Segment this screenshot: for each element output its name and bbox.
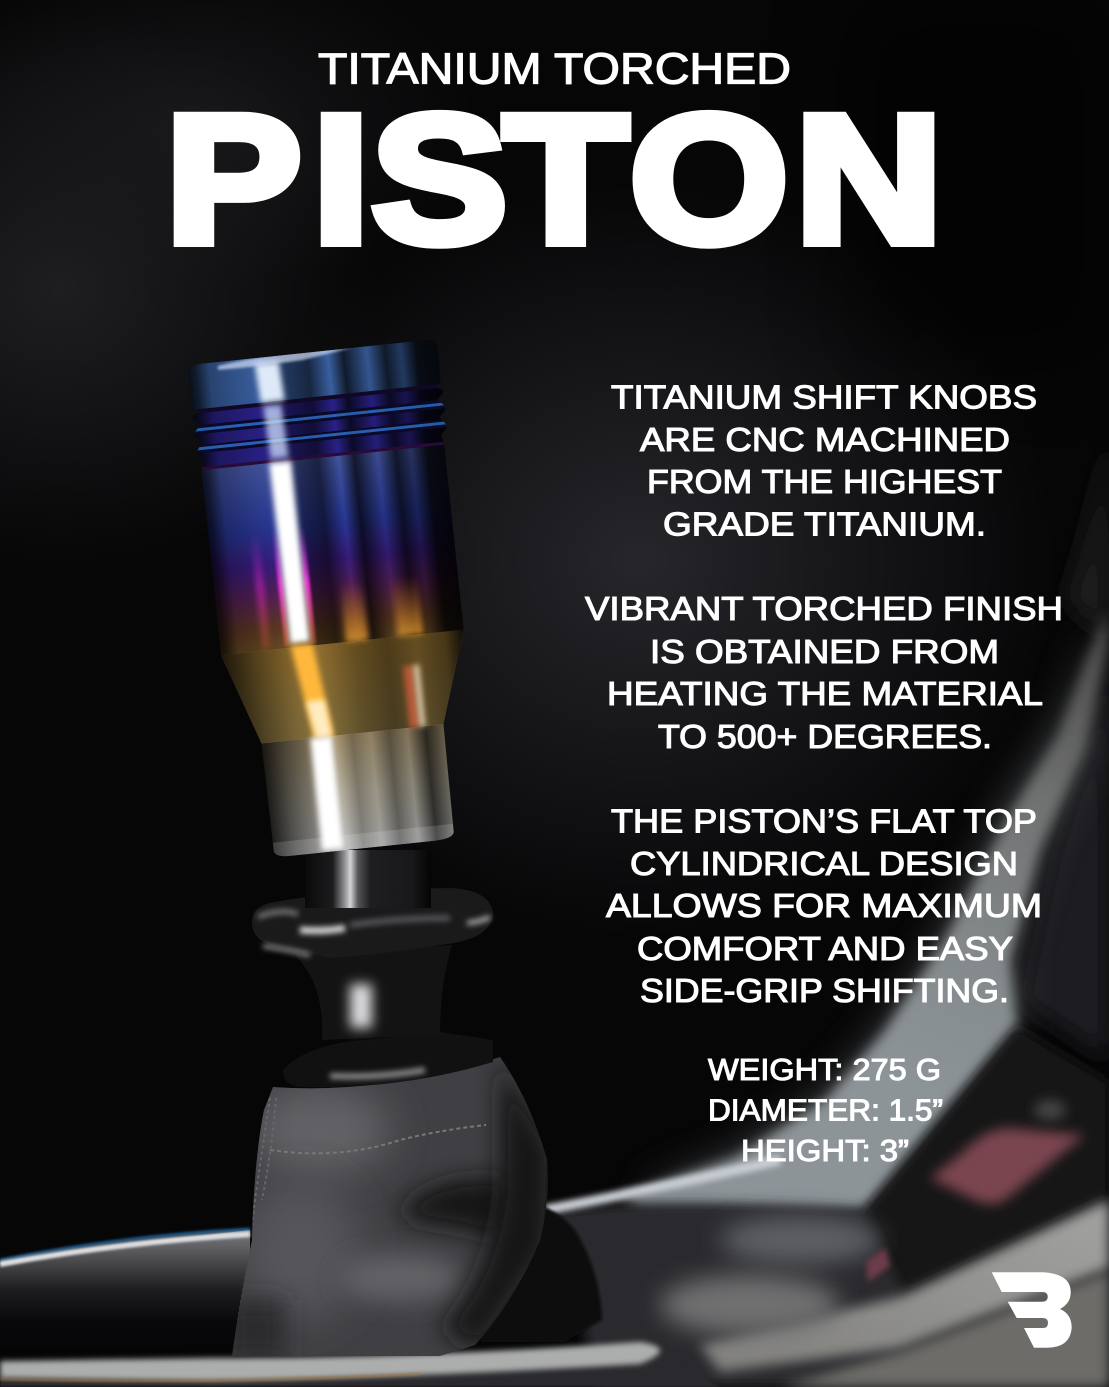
text block: design: CYLINDRICAL DESIGN [630, 845, 1018, 882]
titanium knob [188, 340, 464, 856]
soft swoosh glow [640, 620, 1104, 1210]
text block: design: ALLOWS FOR MAXIMUM [606, 887, 1042, 924]
dark boot lump [480, 1205, 602, 1342]
text block: finish: IS OBTAINED FROM [650, 633, 999, 670]
text block: specifications: HEIGHT: 3” [741, 1133, 909, 1168]
stem [295, 945, 452, 1040]
purple reflection [250, 531, 270, 649]
text block: design: SIDE-GRIP SHIFTING. [640, 972, 1009, 1009]
bottom lip [0, 1355, 720, 1387]
dashboard swoosh [620, 612, 1109, 1210]
gear shifter [225, 850, 555, 1360]
text block: materials: FROM THE HIGHEST [647, 463, 1002, 500]
highlight streak [255, 361, 285, 403]
groove bands [187, 383, 452, 471]
text block: design: THE PISTON’S FLAT TOP [611, 802, 1037, 840]
red label [930, 1128, 1085, 1204]
text block: design: COMFORT AND EASY [637, 930, 1013, 967]
lower flange [283, 1032, 493, 1087]
left console [0, 1230, 250, 1362]
center console surface [550, 1200, 1109, 1387]
dark instrument panel [850, 1027, 1109, 1303]
shift ring [252, 888, 493, 958]
leather boot [225, 1050, 555, 1360]
text block: finish: HEATING THE MATERIAL [607, 675, 1043, 712]
text block: specifications: WEIGHT: 275 G [708, 1052, 941, 1087]
text block: finish: TO 500+ DEGREES. [658, 718, 992, 755]
text block: materials: ARE CNC MACHINED [640, 421, 1010, 458]
text block: specifications: DIAMETER: 1.5” [708, 1092, 943, 1128]
text block: finish [585, 590, 1063, 755]
text block: design [606, 802, 1042, 1009]
text block: materials [611, 378, 1037, 542]
top rim glint [217, 347, 352, 370]
upper shaft [305, 850, 431, 908]
text block: specifications [708, 1052, 943, 1168]
icon: brand logo [992, 1272, 1072, 1348]
orange reflections [340, 580, 368, 642]
headline: PISTON [166, 77, 943, 281]
text block: finish: VIBRANT TORCHED FINISH [585, 590, 1063, 627]
title [166, 44, 943, 281]
text block: materials: TITANIUM SHIFT KNOBS [611, 378, 1037, 416]
subtitle: TITANIUM TORCHED [318, 44, 791, 94]
text block: materials: GRADE TITANIUM. [663, 506, 986, 542]
